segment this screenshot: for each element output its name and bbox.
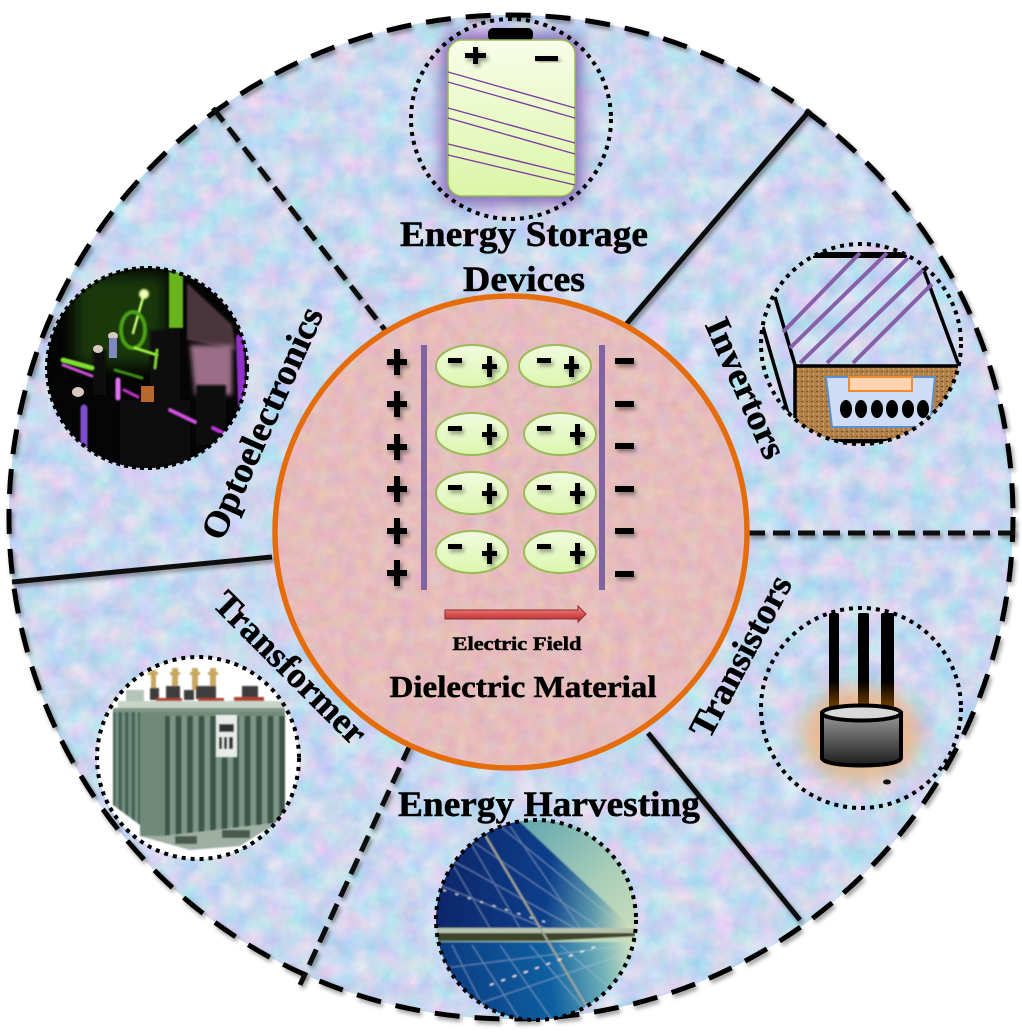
transistor body [822,706,901,766]
central disc [274,295,748,769]
dotted frame [97,657,299,859]
dipole row 4 [436,531,596,573]
panel: invertors icon [761,244,965,450]
plus sign [465,47,486,64]
heading: energy storage devices: Energy Storage [400,214,648,254]
heading: energy storage devices [400,214,648,299]
dotted frame [761,608,961,808]
heading: transistors: Transistors [681,568,800,744]
arrow: electric field direction [445,606,586,622]
right capacitor plate [599,345,605,590]
panel: optoelectronics icon [45,266,250,471]
dipole row 1 [436,345,591,387]
lab photo [45,266,250,471]
orange glow [801,687,921,783]
nameplate [216,715,237,757]
label: electric field: Electric Field [452,634,582,655]
battery terminal [488,28,533,41]
panel: energy harvesting icon [430,815,642,1025]
dotted frame [436,820,636,1020]
panel: transistors icon [761,608,961,808]
solar panels [436,820,636,1020]
dipole row 3 [436,472,596,514]
dotted frame [761,244,961,444]
label: dielectric material: Dielectric Material [390,669,657,704]
positive charges [387,349,407,586]
device drawing [763,253,965,450]
small dot [883,780,891,784]
heading: energy harvesting: Energy Harvesting [398,784,700,824]
negative charges [615,358,634,577]
dotted frame [47,268,247,468]
bushings [148,668,218,690]
heading: transformer: Transformer [206,583,375,752]
battery shadow [442,34,581,204]
heading: invertors: Invertors [697,311,795,465]
panel: energy storage icon [411,19,611,219]
battery stripes [448,72,575,185]
heading: optoelectronics: Optoelectronics [193,301,331,545]
dipole row 2 [436,413,596,455]
battery body [448,40,575,196]
dotted frame [411,19,611,219]
left capacitor plate [421,345,427,590]
transistor legs [829,613,894,713]
panel: central dielectric material [274,295,748,769]
heading: energy storage devices: Devices [463,259,585,299]
minus sign [535,56,558,61]
transformer picture [96,656,300,860]
panel: transformer icon [96,656,300,860]
